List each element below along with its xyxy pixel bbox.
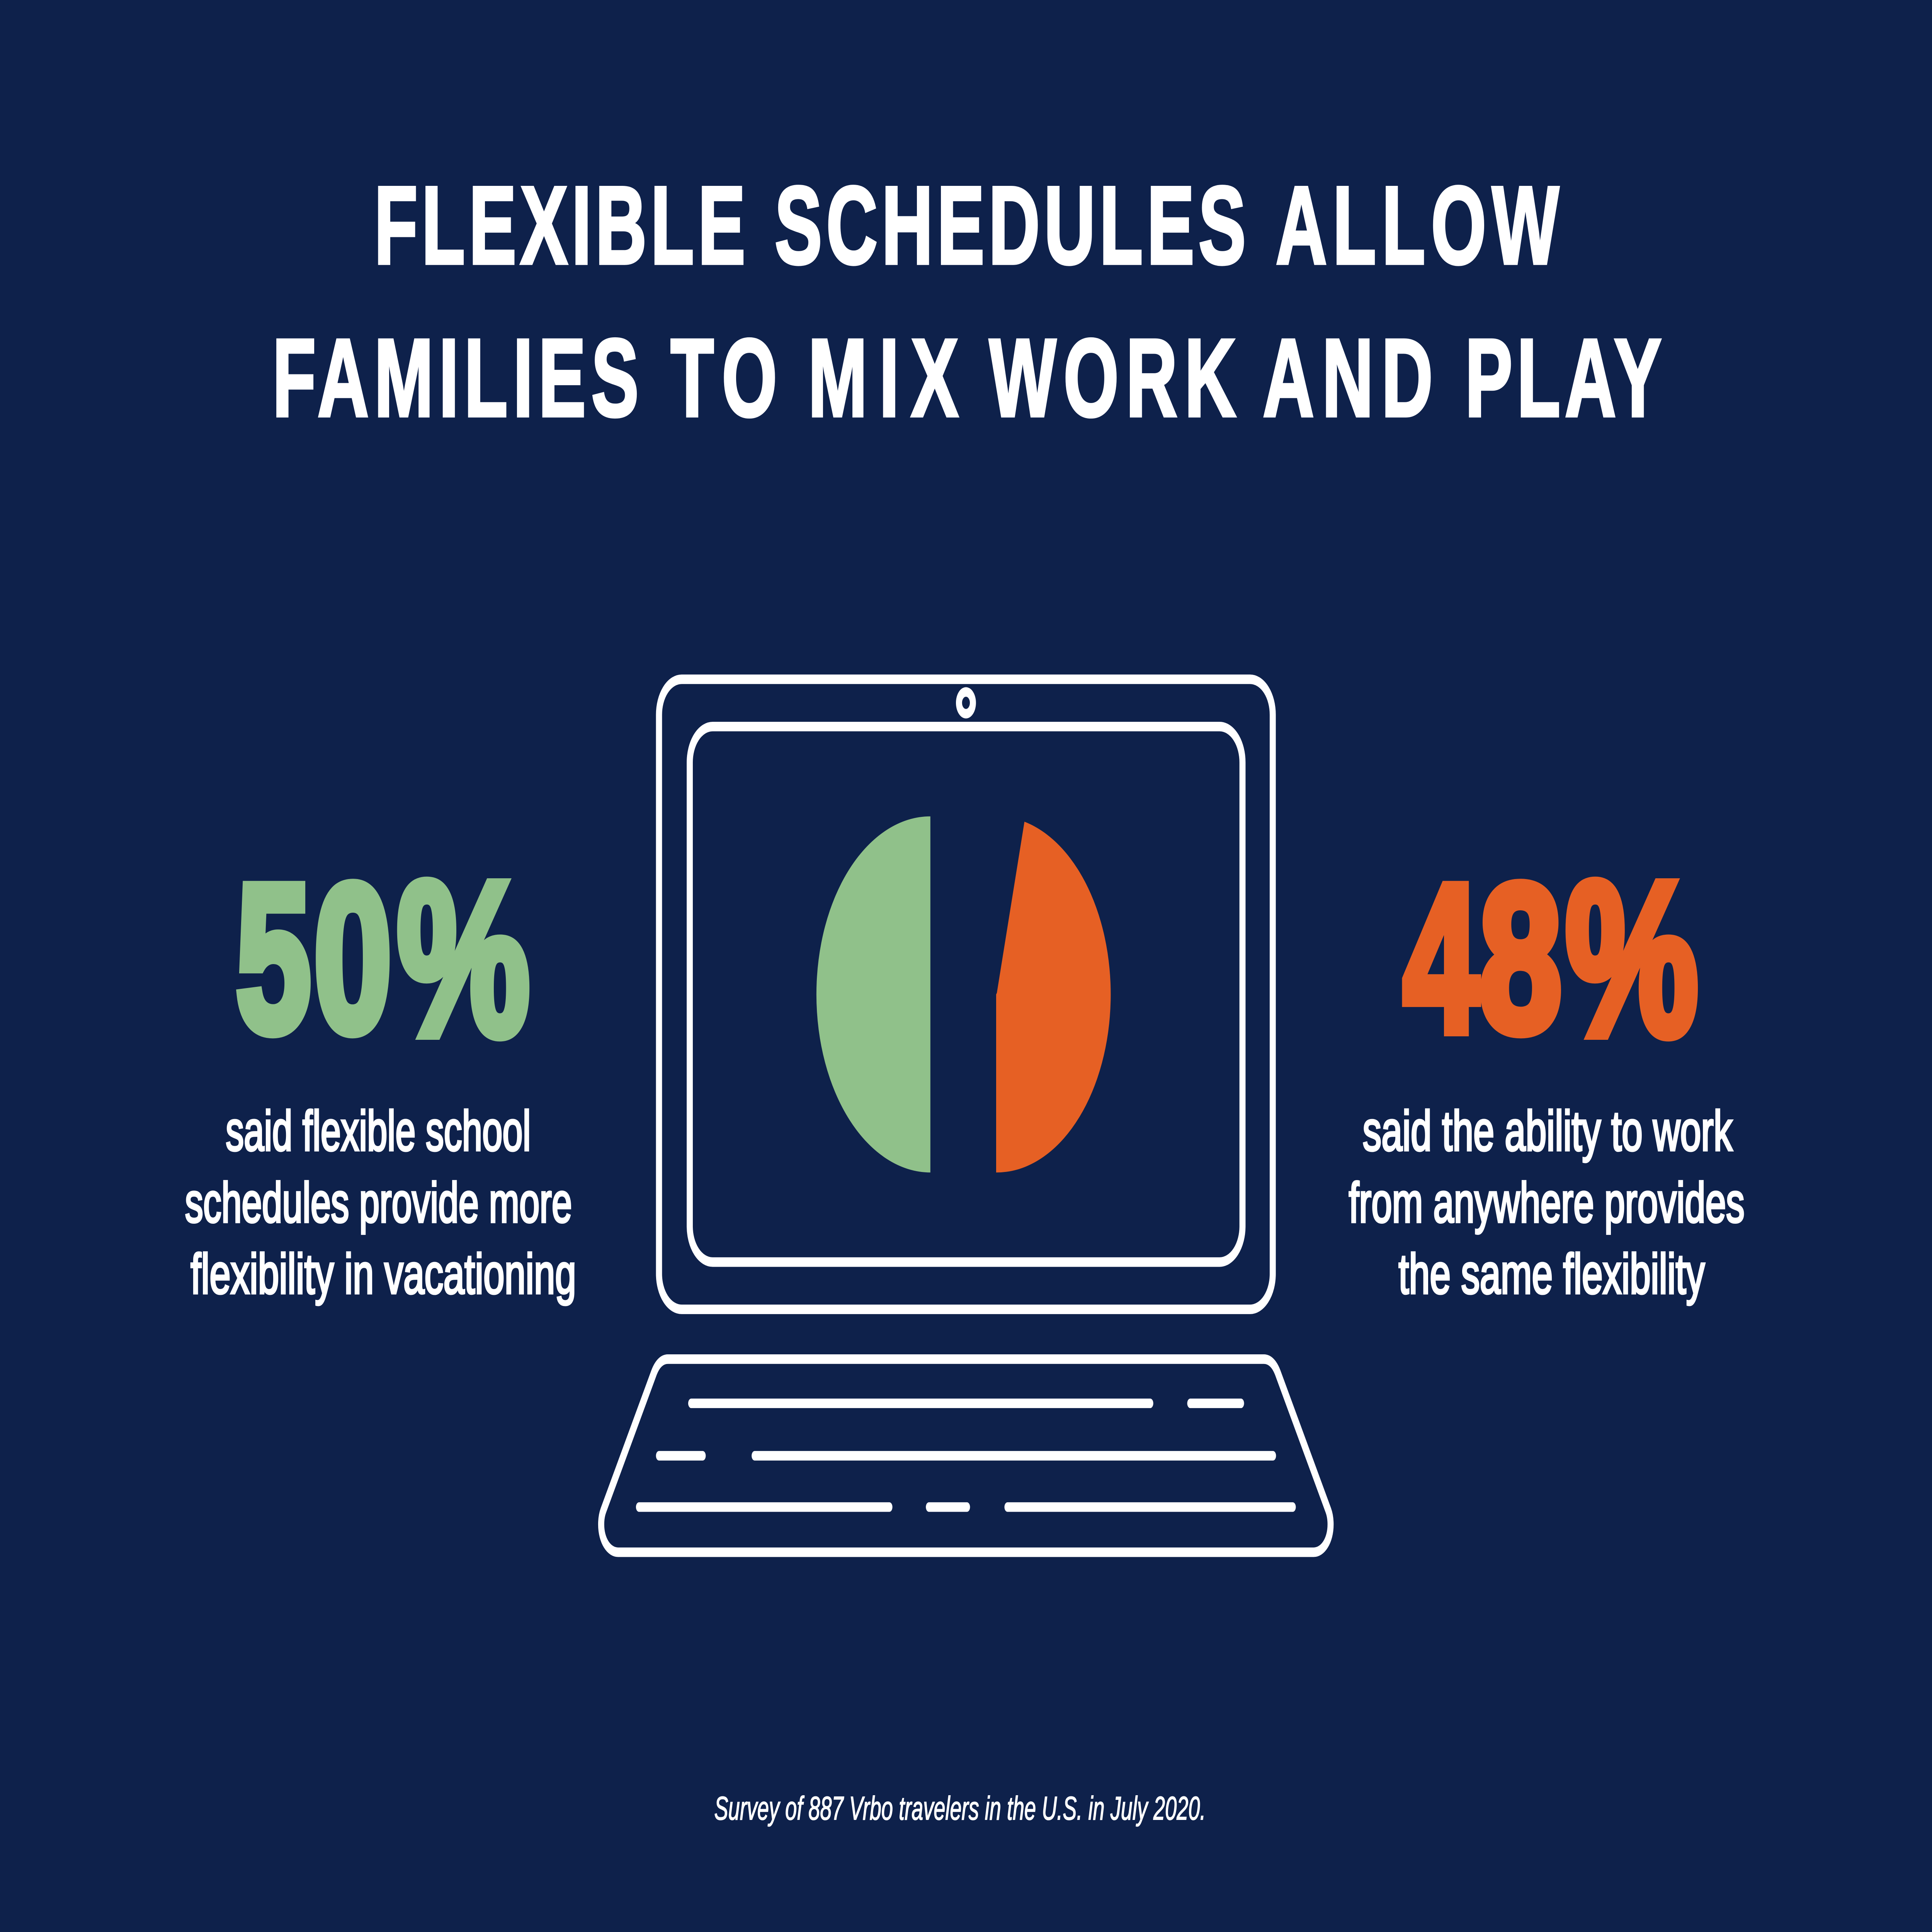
stat description: work from anywhere: said the ability to work <box>1363 1099 1733 1162</box>
stat description: work from anywhere <box>1349 1099 1745 1305</box>
icon: laptop camera <box>959 692 973 714</box>
stat description: work from anywhere: from anywhere provides <box>1349 1171 1745 1234</box>
stat description: flexible school schedules: said flexible school <box>226 1099 531 1162</box>
footnote: survey source: Survey of 887 Vrbo travelers in the U.S. in July 2020. <box>714 1790 1206 1827</box>
title: PLAY <box>1465 316 1662 439</box>
stat number: 48%: % <box>1566 837 1698 1081</box>
title: WORK <box>989 316 1236 439</box>
title: ALLOW <box>1276 163 1559 287</box>
laptop screen outer frame <box>659 679 1273 1310</box>
laptop keyboard outline <box>601 1359 1331 1552</box>
title: TO <box>671 316 777 439</box>
title: FLEXIBLE <box>374 163 745 287</box>
right statistic: 48% <box>1349 837 1745 1305</box>
title: FAMILIES <box>272 316 639 439</box>
stat description: flexible school schedules: flexibility in vacationing <box>190 1242 576 1305</box>
laptop display bezel <box>690 726 1243 1262</box>
pie chart: orange slice, 48% <box>996 822 1111 1172</box>
title: SCHEDULES <box>775 163 1246 287</box>
icon: laptop <box>601 679 1331 1552</box>
stat description: work from anywhere: the same flexibility <box>1398 1242 1705 1305</box>
keyboard key rows <box>639 1403 1293 1507</box>
stat number: 48% <box>1404 837 1698 1081</box>
pie chart: green half, 50% <box>816 816 930 1172</box>
stat number: 50%: 0 <box>314 841 391 1075</box>
stat number: 50%: % <box>397 837 529 1081</box>
title: MIX <box>808 316 958 439</box>
stat description: flexible school schedules: schedules provide more <box>185 1171 572 1234</box>
stat number: 50% <box>236 837 529 1081</box>
title: AND <box>1263 316 1433 439</box>
stat number: 50%: 5 <box>236 842 311 1075</box>
stat number: 48%: 8 <box>1480 842 1561 1075</box>
stat description: flexible school schedules <box>185 1099 576 1305</box>
title <box>272 163 1662 439</box>
left statistic: 50% <box>185 837 576 1305</box>
stat number: 48%: 4 <box>1404 842 1479 1075</box>
